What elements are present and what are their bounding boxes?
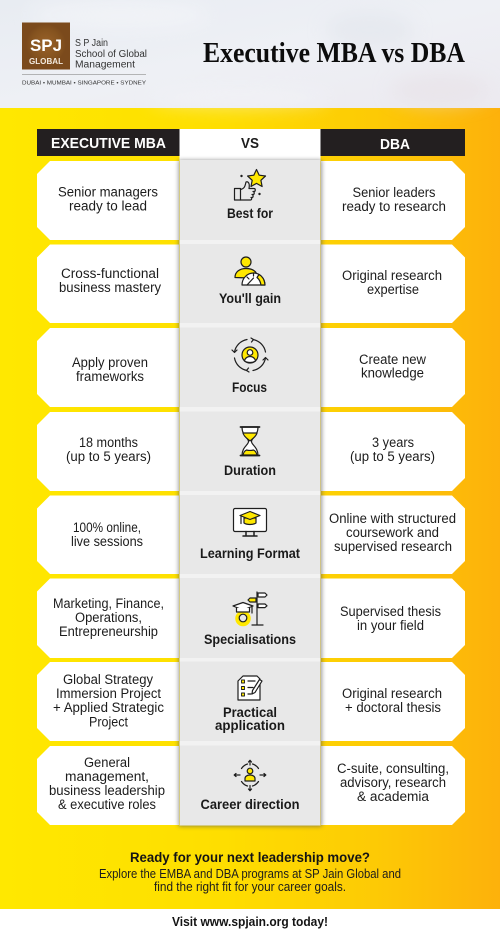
left text: Immersion Project	[56, 686, 161, 701]
logo wordmark: Management	[75, 60, 135, 70]
right text	[342, 686, 442, 715]
row: Career direction	[49, 755, 449, 812]
left text	[53, 672, 164, 730]
row: Focus	[72, 338, 426, 395]
left text: & executive roles	[58, 797, 156, 812]
left text	[66, 435, 151, 464]
header: Executive MBA: EXECUTIVE MBA	[51, 135, 166, 152]
header: Executive MBA	[37, 129, 180, 156]
header: VS	[180, 129, 320, 160]
row: Practical application	[53, 672, 442, 733]
left text: Entrepreneurship	[59, 624, 158, 639]
left text	[49, 755, 165, 812]
left text: General	[84, 755, 130, 770]
left text: (up to 5 years)	[66, 449, 151, 464]
left text: + Applied Strategic	[53, 700, 164, 715]
right text	[340, 604, 441, 633]
right text: knowledge	[361, 366, 424, 380]
right text: & academia	[357, 789, 429, 804]
label: Focus	[232, 380, 267, 395]
left text: Cross-functional	[61, 266, 159, 281]
footer link text: Visit www.spjain.org today!	[172, 915, 328, 929]
icon: circular arrows around person	[232, 338, 268, 372]
left text: frameworks	[76, 369, 144, 384]
right text: Senior leaders	[352, 185, 436, 200]
icon: hourglass	[240, 427, 260, 456]
right text: C-suite, consulting,	[337, 761, 449, 776]
label: Career direction	[200, 797, 300, 812]
right text: Online with structured	[329, 511, 456, 526]
left text: management,	[65, 769, 149, 784]
cta heading: Ready for your next leadership move?	[130, 850, 370, 865]
label: Learning Format	[200, 546, 300, 561]
header: DBA: DBA	[380, 136, 410, 153]
right text: ready to research	[342, 199, 446, 214]
logo mark: GLOBAL	[29, 57, 63, 66]
left text: Apply proven	[72, 355, 148, 370]
label: Best for	[227, 206, 274, 221]
row: Specialisations	[53, 592, 441, 647]
logo wordmark: S P Jain	[75, 38, 108, 49]
right text: 3 years	[372, 435, 414, 450]
icon: thumbs up with star	[234, 170, 266, 200]
right text: in your field	[357, 618, 424, 633]
header: VS: VS	[241, 135, 259, 152]
label: application	[215, 718, 285, 733]
row: Duration	[66, 427, 435, 478]
row: Best for	[58, 170, 446, 221]
right text	[342, 268, 442, 297]
icon: person with outward arrows	[234, 760, 266, 791]
right text	[337, 761, 449, 804]
right text: Supervised thesis	[340, 604, 441, 619]
label: Specialisations	[204, 632, 296, 647]
right text: Original research	[342, 686, 442, 701]
left text: Senior managers	[58, 184, 158, 200]
left text: business leadership	[49, 783, 165, 798]
logo mark	[22, 22, 70, 70]
left text: Project	[89, 714, 128, 730]
icon: monitor with graduation cap	[234, 508, 266, 536]
cta body	[99, 867, 401, 894]
label	[215, 705, 285, 733]
right text	[329, 511, 456, 554]
logo wordmark	[75, 38, 147, 70]
label: Practical	[223, 705, 277, 720]
left text	[71, 520, 143, 549]
right column cards	[321, 161, 465, 825]
icon: person with gauge	[235, 257, 265, 285]
left text: 18 months	[79, 435, 138, 450]
left text	[72, 355, 148, 384]
left text	[59, 266, 161, 295]
left text: 100% online,	[73, 520, 141, 535]
cta body: find the right fit for your career goals.	[154, 880, 346, 894]
right text: + doctoral thesis	[345, 700, 441, 715]
right text	[359, 352, 426, 380]
left text: Global Strategy	[63, 672, 153, 687]
left text	[58, 184, 158, 214]
logo locations: DUBAI • MUMBAI • SINGAPORE • SYDNEY	[22, 80, 146, 86]
left text: Operations,	[75, 610, 142, 625]
left text: ready to lead	[69, 198, 147, 214]
left text	[53, 596, 164, 639]
right text: expertise	[367, 282, 419, 297]
right text: Original research	[342, 268, 442, 283]
right text	[350, 435, 435, 464]
right text: coursework and	[346, 525, 439, 540]
left text: live sessions	[71, 534, 143, 549]
right text: Create new	[359, 352, 426, 367]
logo: SP Jain Global	[22, 22, 147, 86]
left text: business mastery	[59, 280, 161, 295]
right text: advisory, research	[340, 775, 446, 790]
center column	[178, 160, 322, 826]
icon: signpost with graduation cap and gear	[233, 592, 267, 625]
column headers	[37, 129, 465, 160]
label: You'll gain	[219, 291, 281, 306]
call to action	[99, 850, 401, 894]
cta body: Explore the EMBA and DBA programs at SP Jain Global and	[99, 867, 401, 881]
icon: checklist with pen	[238, 676, 262, 700]
left text: Marketing, Finance,	[53, 596, 164, 611]
right text: supervised research	[334, 539, 452, 554]
right text	[342, 185, 446, 214]
label: Duration	[224, 463, 276, 478]
row: You'll gain	[59, 257, 442, 306]
footer bar	[0, 909, 500, 935]
header banner	[0, 0, 500, 108]
right text: (up to 5 years)	[350, 449, 435, 464]
row: Learning Format	[71, 508, 456, 561]
header: DBA	[320, 129, 465, 156]
logo mark: SPJ	[30, 36, 62, 55]
left column cards	[37, 161, 179, 825]
title: Executive MBA vs DBA	[203, 37, 465, 69]
logo wordmark: School of Global	[75, 49, 147, 60]
